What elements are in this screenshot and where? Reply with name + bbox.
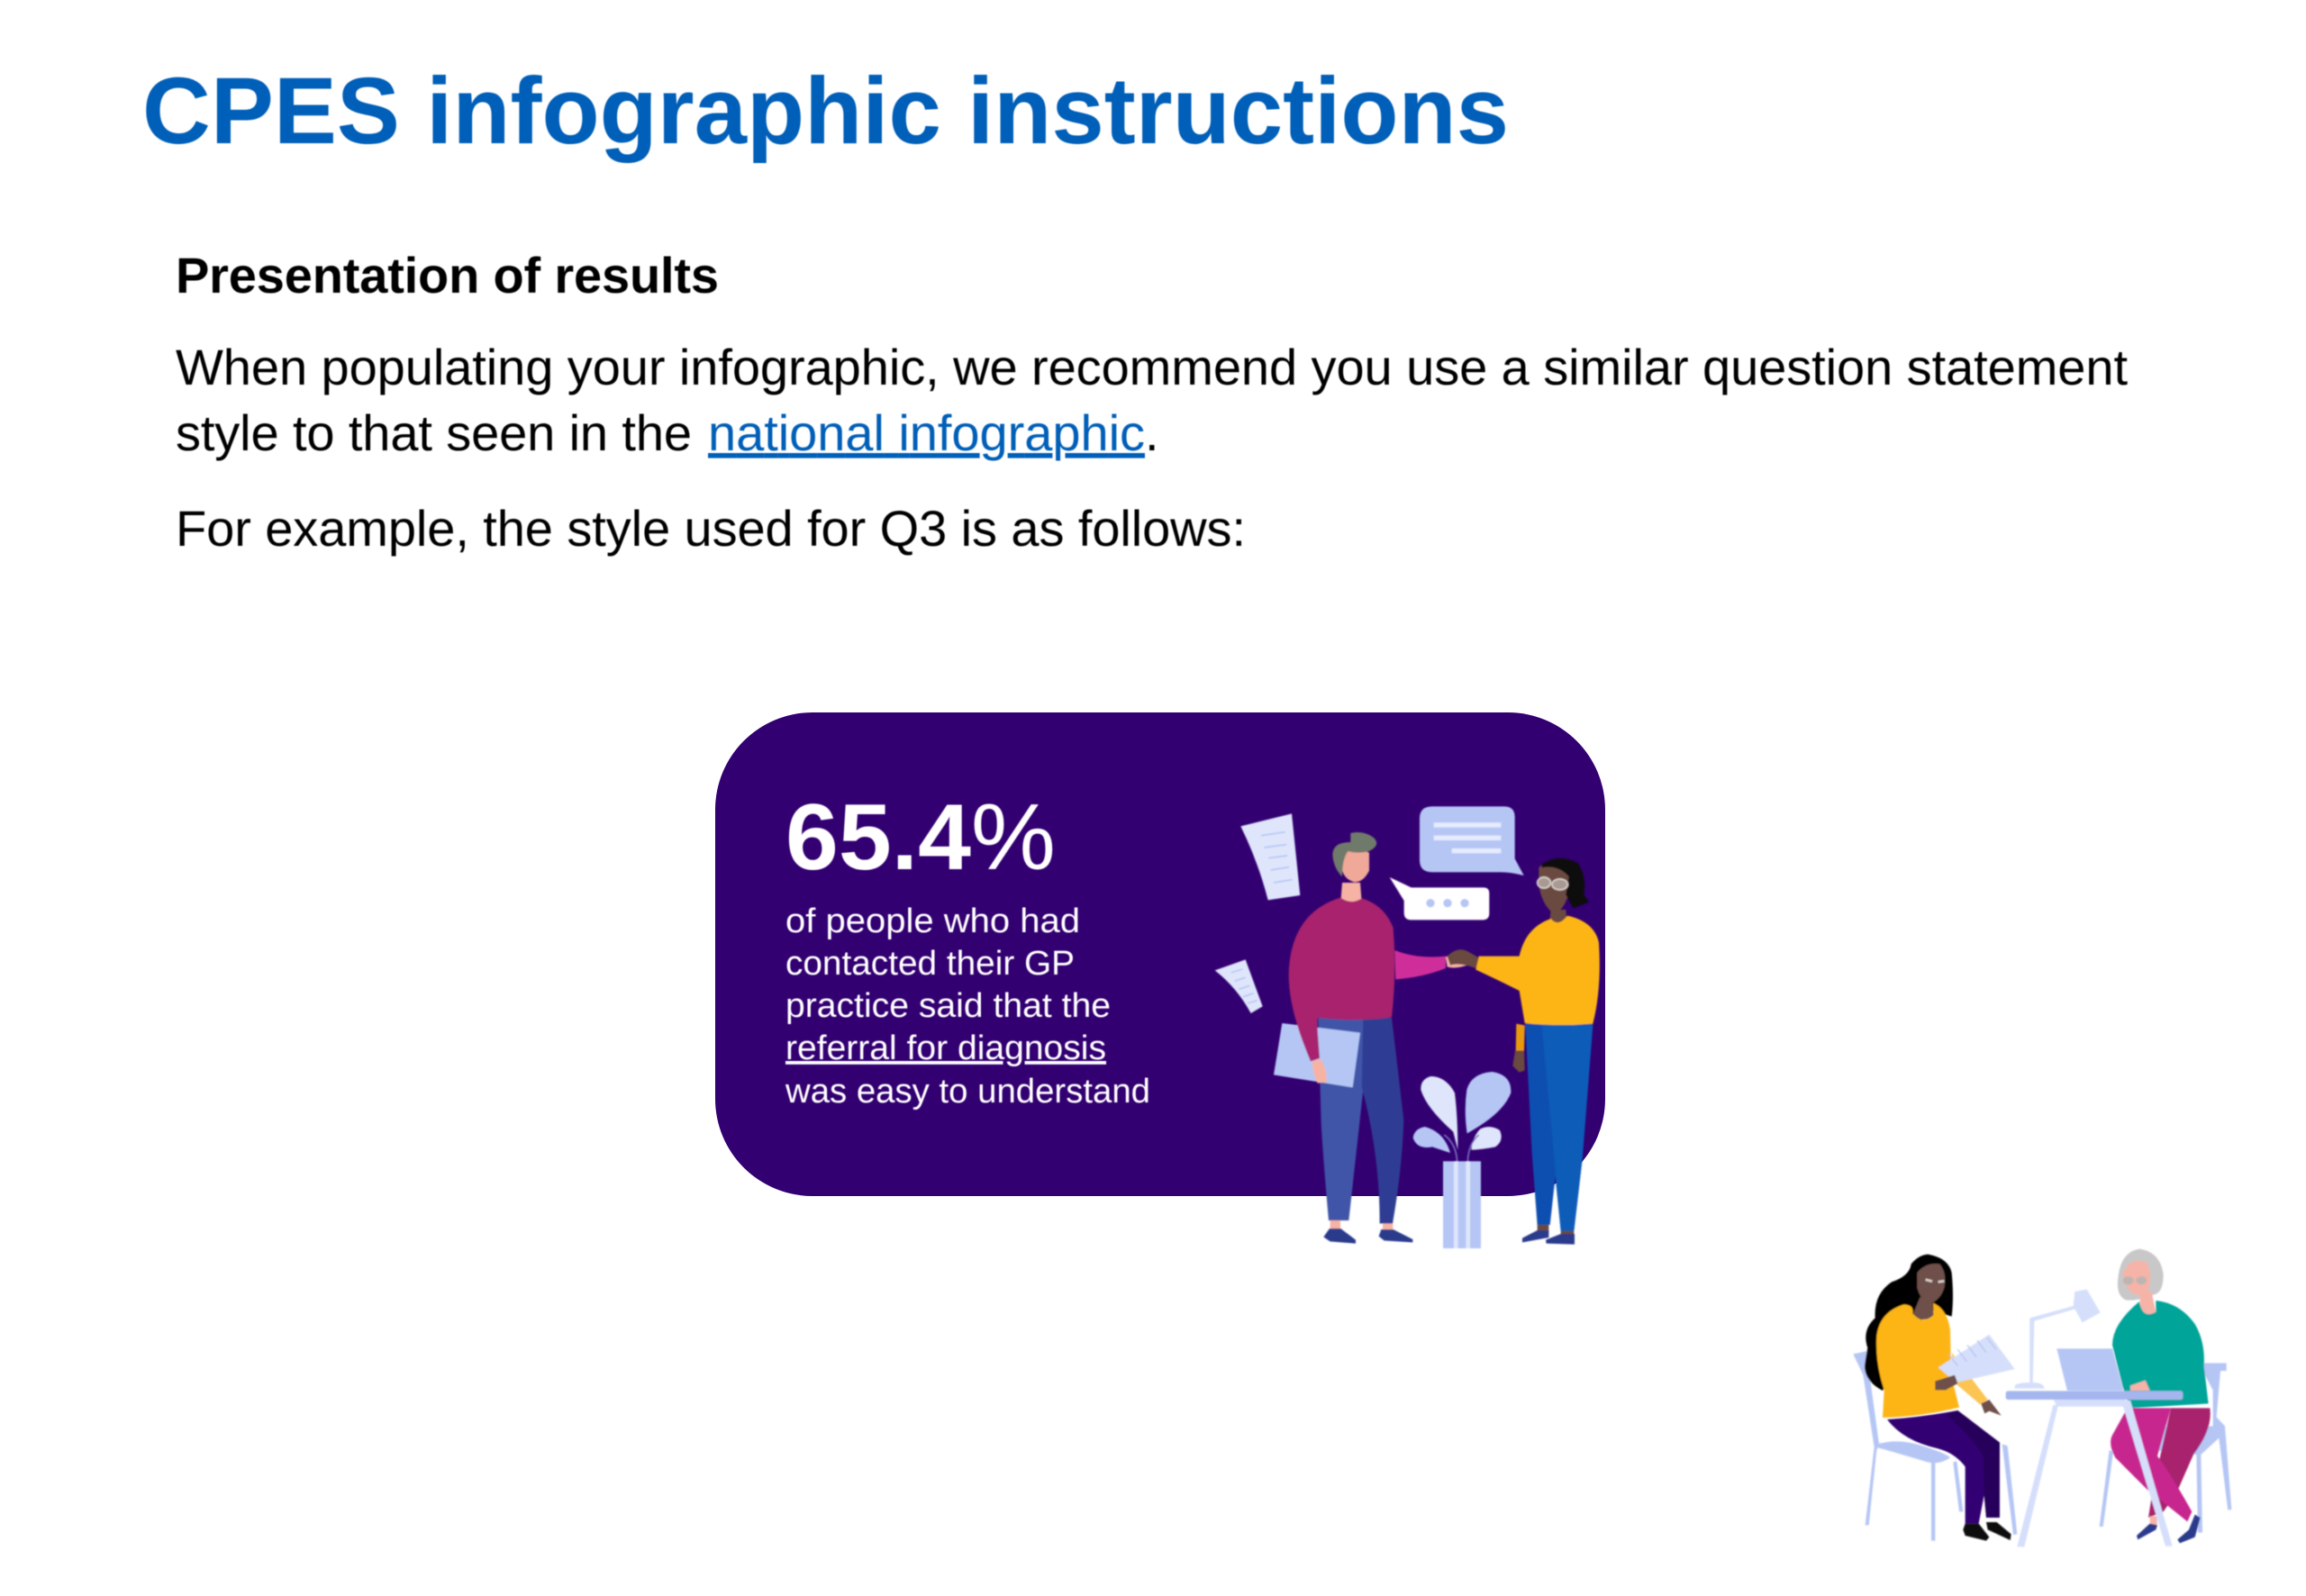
left chair	[1853, 1351, 2017, 1541]
section heading: Presentation of results	[176, 247, 719, 304]
example sentence: For example, the style used for Q3 is as follows:	[176, 500, 1246, 557]
icon: paper sheet large	[1240, 813, 1300, 900]
statistic description	[785, 902, 1150, 1111]
body paragraph: .	[1145, 404, 1159, 461]
right chair	[2100, 1363, 2231, 1533]
statistic description: practice said that the	[785, 987, 1111, 1025]
statistic description: was easy to understand	[785, 1073, 1150, 1111]
big statistic: 65.4%	[785, 785, 1056, 890]
illustration: two people at a desk	[1853, 1249, 2231, 1546]
link: national infographic: national infographic	[708, 404, 1145, 461]
body paragraph: When populating your infographic, we recommend you use a similar question statement	[176, 339, 2128, 395]
body paragraph	[176, 339, 2128, 461]
icon: paper sheet small	[1215, 959, 1263, 1013]
icon: speech bubble blue	[1420, 806, 1524, 875]
card background	[715, 712, 1605, 1196]
icon: plant in vase	[1413, 1072, 1511, 1248]
body paragraph: style to that seen in the	[176, 404, 692, 461]
statistic description: of people who had	[785, 902, 1080, 940]
icon: speech bubble white	[1390, 877, 1489, 920]
statistic description: referral for diagnosis	[785, 1029, 1106, 1067]
desk with lamp and laptop	[2006, 1290, 2183, 1546]
illustration: two people shaking hands	[1215, 806, 1600, 1248]
figure: woman	[1448, 858, 1600, 1245]
statistic description: contacted their GP	[785, 945, 1075, 983]
figure: woman at laptop	[2111, 1249, 2211, 1543]
panel: example statistic card	[715, 712, 1605, 1248]
figure: man	[1274, 832, 1471, 1244]
title: CPES infographic instructions	[142, 59, 1509, 164]
figure: woman reading	[1865, 1255, 2015, 1541]
